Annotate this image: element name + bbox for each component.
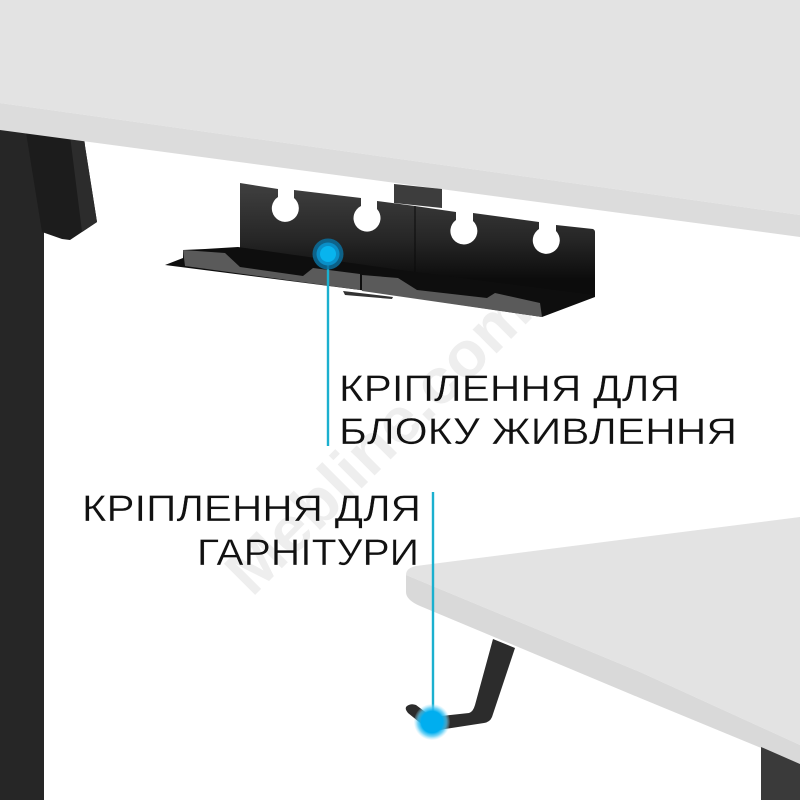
label: headset mount [82, 488, 421, 573]
label: power supply mount: БЛОКУ ЖИВЛЕННЯ [339, 411, 737, 452]
leader line [327, 254, 329, 446]
watermark: Mebline.com [211, 274, 545, 608]
front lip left [183, 250, 360, 290]
leader line [432, 492, 434, 722]
label: headset mount: ГАРНІТУРИ [197, 532, 419, 573]
centre seam [414, 206, 416, 272]
callout: power supply marker [312, 238, 344, 446]
label: power supply mount: КРІПЛЕННЯ ДЛЯ [339, 368, 680, 409]
tray floor [165, 247, 595, 317]
front lip right [362, 275, 542, 317]
callout: headset marker [414, 492, 450, 740]
label: headset mount: КРІПЛЕННЯ ДЛЯ [82, 488, 421, 529]
bottom desk surface [406, 517, 800, 764]
top desk surface [0, 0, 800, 237]
label: power supply mount [339, 368, 737, 452]
back plate with cable slots [240, 183, 595, 296]
headset hook [406, 639, 515, 730]
mounting tab [394, 184, 442, 208]
lower mounting tab [343, 291, 393, 299]
left desk leg [0, 120, 97, 800]
power supply bracket [165, 183, 595, 317]
right desk leg [761, 747, 800, 800]
dot [312, 238, 344, 270]
dot [414, 704, 450, 740]
